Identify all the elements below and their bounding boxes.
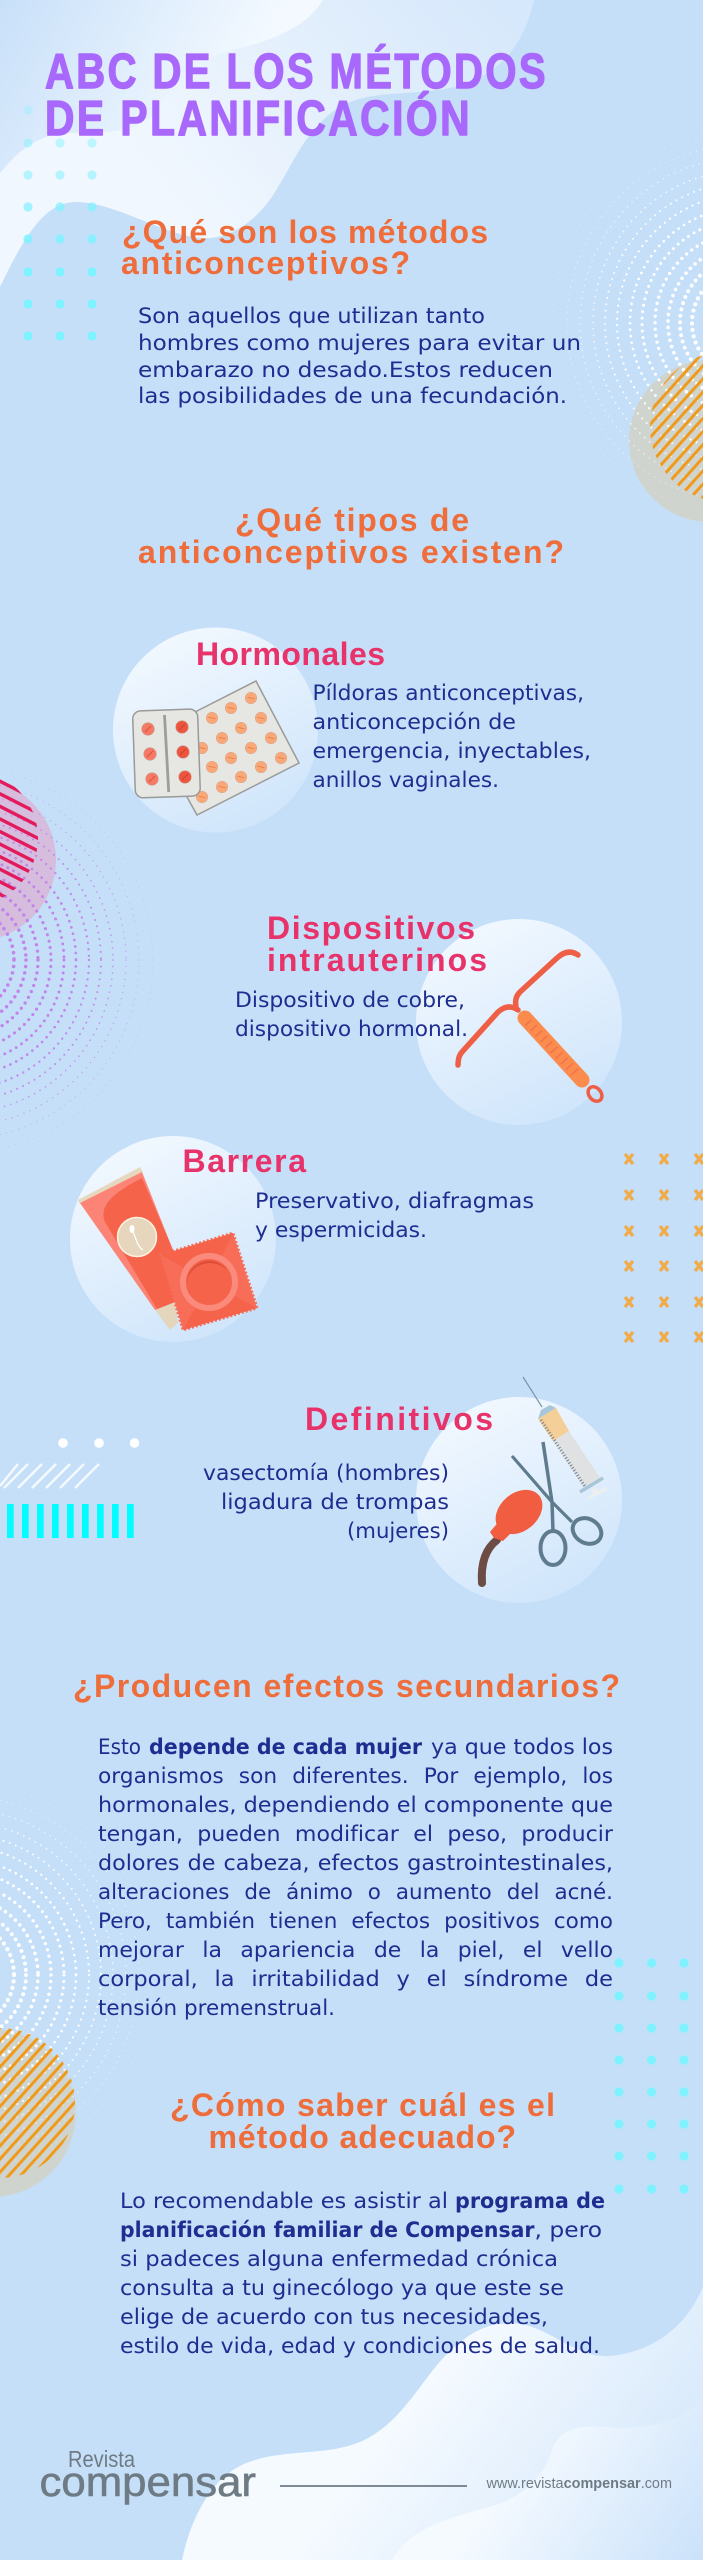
icon: bulb: [482, 1481, 551, 1583]
text: cómo saber: estilo de vida, edad y condiciones de salud.: [120, 2334, 600, 2358]
heading: qué son: ¿Qué son los métodos: [122, 214, 488, 250]
text: hormonales: anticoncepción de: [312, 710, 516, 734]
heading: qué tipos: anticonceptivos existen?: [138, 534, 564, 570]
icon: condom packet: [161, 1233, 257, 1330]
text: cómo saber: [120, 2189, 605, 2358]
decoration: cyan bars left: [7, 1504, 134, 1538]
title: [45, 45, 548, 146]
heading: cómo saber: método adecuado?: [208, 2119, 516, 2155]
text: definition: embarazo no desado.Estos reducen: [138, 358, 553, 382]
text: barrera: y espermicidas.: [255, 1218, 427, 1242]
text: definitivos: [203, 1461, 449, 1543]
text: efectos secundarios: organismos son diferentes. Por ejemplo, los: [98, 1764, 613, 1788]
logo: Revista Compensar: Revista: [68, 2446, 135, 2472]
heading: barrera: Barrera: [182, 1143, 306, 1179]
circle: hormonales: [113, 628, 318, 832]
decoration: orange x marks right: [625, 1154, 703, 1342]
background wave: top small: [0, 0, 323, 173]
text: hormonales: emergencia, inyectables,: [312, 739, 591, 763]
heading: qué tipos: [138, 502, 564, 570]
heading: dispositivos: intrauterinos: [267, 942, 487, 978]
decoration: grey circle top right: [629, 360, 703, 522]
text: efectos secundarios: ya que todos los: [431, 1735, 613, 1759]
heading: dispositivos: Dispositivos: [267, 910, 475, 946]
panel: dispositivos: [235, 910, 622, 1125]
text: efectos secundarios: hormonales, dependiendo el componente que: [98, 1793, 613, 1817]
text: cómo saber: si padeces alguna enfermedad crónica: [120, 2247, 558, 2271]
icon: tube of spermicide: [78, 1167, 178, 1330]
decoration: orange stripes top right: [650, 352, 703, 502]
heading: efectos secundarios: ¿Producen efectos secundarios?: [73, 1668, 620, 1704]
panel: barrera: [70, 1136, 534, 1342]
text: definition: las posibilidades de una fecundación.: [138, 384, 567, 408]
icon: IUD: [458, 952, 605, 1104]
decoration: white dotted rings bottom left: [0, 1782, 153, 2168]
text: definition: [138, 304, 581, 408]
text: efectos secundarios: corporal, la irritabilidad y el síndrome de: [98, 1967, 613, 1991]
text: definition: hombres como mujeres para evitar un: [138, 331, 581, 355]
text: definitivos: ligadura de trompas: [221, 1490, 449, 1514]
footer rule: [280, 2485, 467, 2487]
circle: dispositivos: [416, 919, 622, 1125]
text: efectos secundarios: mejorar la apariencia de la piel, el vello: [98, 1938, 613, 1962]
background wave: bottom small: [392, 2397, 703, 2560]
text: efectos secundarios: depende de cada mujer: [149, 1735, 423, 1759]
text: efectos secundarios: [98, 1735, 613, 2020]
text: cómo saber: , pero: [534, 2218, 602, 2242]
text: hormonales: anillos vaginales.: [312, 768, 499, 792]
decoration: white dots left: [58, 1438, 139, 1448]
text: efectos secundarios: alteraciones de ánimo o aumento del acné.: [98, 1880, 613, 1904]
circle: definitivos: [416, 1397, 622, 1603]
heading: hormonales: Hormonales: [196, 636, 385, 672]
text: barrera: [255, 1189, 534, 1242]
heading: qué tipos: ¿Qué tipos de: [235, 502, 469, 538]
background wave: bottom large: [182, 2287, 703, 2560]
decoration: white slashes left: [0, 1464, 99, 1488]
decoration: orange stripes bottom left: [0, 2028, 75, 2178]
text: definitivos: vasectomía (hombres): [203, 1461, 449, 1485]
heading: dispositivos: [267, 910, 487, 978]
text: dispositivos: Dispositivo de cobre,: [235, 988, 465, 1012]
icon: pill blisters: [132, 681, 299, 815]
text: cómo saber: elige de acuerdo con tus necesidades,: [120, 2305, 548, 2329]
heading: cómo saber: ¿Cómo saber cuál es el: [170, 2087, 555, 2123]
heading: definitivos: Definitivos: [305, 1401, 493, 1437]
decoration: cyan dots bottom right: [614, 1958, 689, 2194]
text: definition: Son aquellos que utilizan tanto: [138, 304, 485, 328]
title: ABC DE LOS MÉTODOS: [45, 45, 548, 99]
text: cómo saber: programa de: [455, 2189, 605, 2213]
logo: Revista Compensar: compensar: [40, 2458, 256, 2505]
text: hormonales: [312, 681, 591, 792]
decoration: grey circle bottom left: [0, 2029, 76, 2197]
icon: syringe: [523, 1377, 607, 1498]
text: definitivos: (mujeres): [347, 1519, 449, 1543]
decoration: purple dotted rings left: [0, 767, 153, 1153]
heading: qué son: [121, 214, 488, 281]
text: cómo saber: planificación familiar de Compensar: [120, 2218, 535, 2242]
text: cómo saber: consulta a tu ginecólogo ya que este se: [120, 2276, 564, 2300]
text: dispositivos: [235, 988, 468, 1041]
decoration: cyan dots top left: [23, 105, 97, 341]
text: hormonales: Píldoras anticonceptivas,: [312, 681, 584, 705]
text: efectos secundarios: Pero, también tienen efectos positivos como: [98, 1909, 613, 1933]
heading: cómo saber: [170, 2087, 555, 2155]
text: efectos secundarios: tensión premenstrual.: [98, 1996, 335, 2020]
decoration: pink circle left: [0, 779, 56, 941]
heading: qué son: anticonceptivos?: [121, 245, 410, 281]
decoration: white dotted rings top right: [553, 130, 703, 516]
background wave: top large: [0, 0, 534, 287]
decoration: crimson stripes left: [0, 770, 38, 906]
title: DE PLANIFICACIÓN: [45, 91, 472, 146]
icon: scissors: [512, 1442, 606, 1565]
text: efectos secundarios: Esto: [98, 1735, 141, 1759]
panel: definitivos: [203, 1377, 622, 1603]
text: dispositivos: dispositivo hormonal.: [235, 1017, 468, 1041]
text: efectos secundarios: dolores de cabeza, efectos gastrointestinales,: [98, 1851, 613, 1875]
text: cómo saber: Lo recomendable es asistir al: [120, 2189, 448, 2213]
text: efectos secundarios: tengan, pueden modificar el peso, producir: [98, 1822, 613, 1846]
footer url: www.revistacompensar.com: [486, 2476, 672, 2492]
text: barrera: Preservativo, diafragmas: [255, 1189, 534, 1213]
panel: hormonales: [113, 628, 591, 832]
circle: barrera: [70, 1136, 276, 1342]
